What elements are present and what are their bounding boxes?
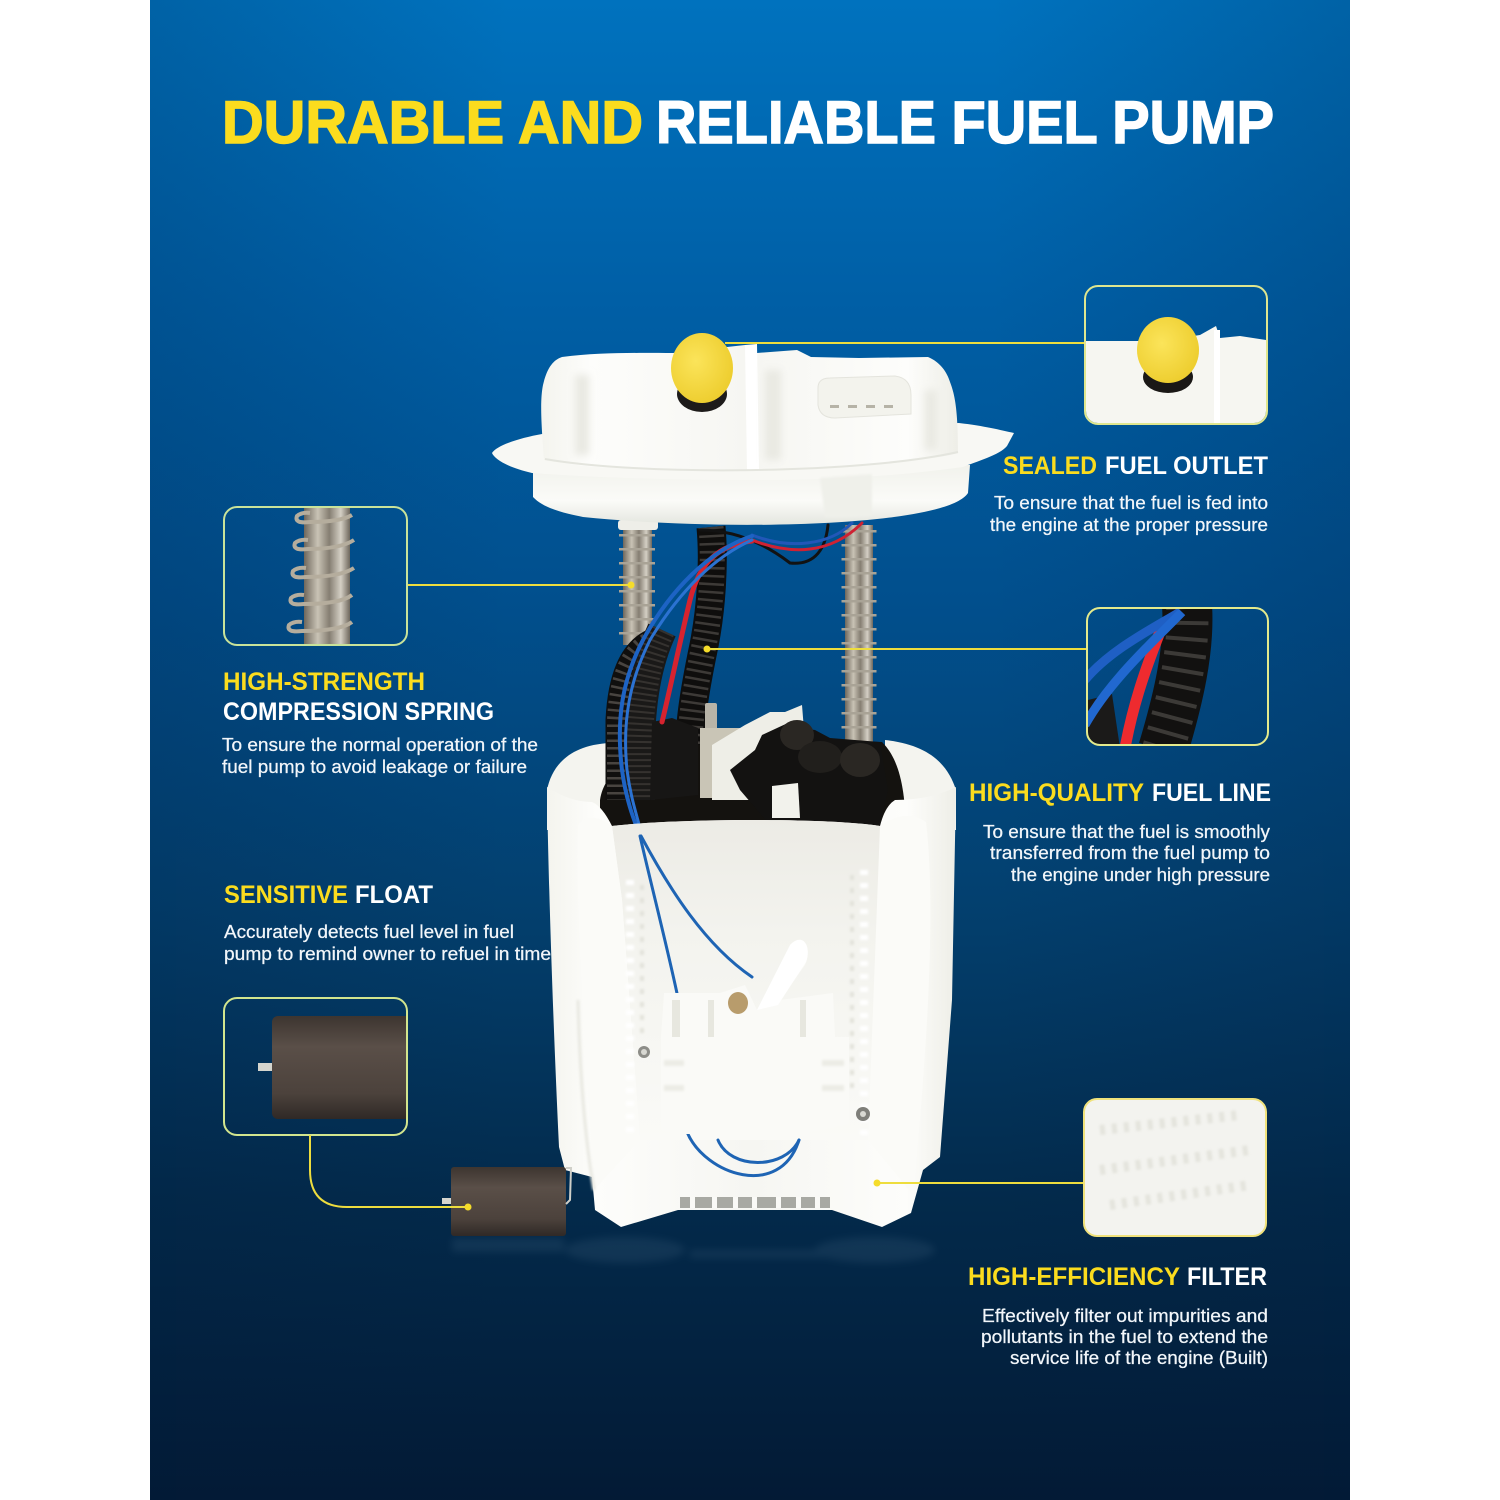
heading: sealed fuel outlet	[1003, 452, 1268, 480]
body text: sealed fuel outlet: the engine at the proper pressure	[990, 514, 1268, 535]
heading: sealed fuel outlet: SEALED	[1003, 452, 1097, 480]
body text: fuel line	[983, 821, 1271, 885]
heading: compression spring	[223, 668, 494, 726]
callout: filter	[874, 1099, 1268, 1368]
title: RELIABLE FUEL PUMP	[656, 89, 1274, 156]
body text: compression spring: To ensure the normal operation of the	[222, 734, 538, 755]
leader line: outlet	[725, 342, 1085, 344]
leader line: fuel line	[704, 646, 1087, 652]
heading: filter: FILTER	[1187, 1263, 1267, 1291]
heading: compression spring: HIGH-STRENGTH	[223, 668, 425, 696]
heading: sealed fuel outlet: FUEL OUTLET	[1105, 452, 1268, 480]
body text: sealed fuel outlet: To ensure that the fuel is fed into	[994, 492, 1268, 513]
body text: fuel line: To ensure that the fuel is smoothly	[983, 821, 1271, 842]
body text: fuel line: transferred from the fuel pump to	[990, 842, 1270, 863]
left rod and spring	[618, 520, 658, 645]
heading: sensitive float: FLOAT	[355, 881, 433, 909]
heading: fuel line: HIGH-QUALITY	[969, 779, 1144, 807]
pump top drum, flange and lid	[492, 344, 1014, 525]
blue gradient panel	[150, 0, 1350, 1500]
body text: sensitive float: pump to remind owner to refuel in time	[224, 943, 551, 964]
bottom slots	[680, 1197, 830, 1208]
body text: compression spring	[222, 734, 538, 777]
heading: filter: HIGH-EFFICIENCY	[968, 1263, 1180, 1291]
back of canister	[547, 738, 956, 830]
detail box: spring	[224, 505, 407, 647]
callout: compression spring	[222, 505, 634, 777]
body text: filter: service life of the engine (Built)	[1010, 1347, 1268, 1368]
wires	[620, 523, 862, 836]
floor reflection	[452, 1237, 935, 1263]
hoses	[618, 527, 712, 800]
leader line: filter	[874, 1180, 1084, 1186]
detail box: filter	[1084, 1099, 1266, 1236]
title: DURABLE AND	[222, 89, 643, 156]
screws	[638, 1046, 870, 1121]
float	[442, 1167, 571, 1236]
detail box: float	[224, 998, 412, 1135]
detail box: fuel line	[1085, 605, 1268, 750]
body text: fuel line: the engine under high pressure	[1011, 864, 1270, 885]
callout: sensitive float	[224, 881, 551, 1210]
black connector and pump internals	[650, 703, 888, 825]
heading: fuel line: FUEL LINE	[1152, 779, 1271, 807]
float arm mount	[638, 940, 870, 1134]
callout: fuel line	[704, 605, 1271, 885]
body text: sensitive float	[224, 921, 551, 964]
detail box: outlet cap	[1085, 286, 1267, 425]
yellow outlet cap	[671, 333, 733, 412]
heading: sensitive float: SENSITIVE	[224, 881, 348, 909]
body text: compression spring: fuel pump to avoid leakage or failure	[222, 756, 527, 777]
title	[222, 89, 1274, 156]
canister body	[547, 787, 956, 1227]
heading: fuel line	[969, 779, 1271, 807]
body text: sealed fuel outlet	[990, 492, 1268, 535]
leader line: spring	[407, 582, 634, 588]
body text: filter: pollutants in the fuel to extend the	[981, 1326, 1268, 1347]
heading: sensitive float	[224, 881, 433, 909]
callout: sealed fuel outlet	[725, 286, 1268, 535]
body text: filter: Effectively filter out impurities and	[982, 1305, 1268, 1326]
fuel pump illustration	[442, 333, 1014, 1263]
body text: filter	[981, 1305, 1268, 1368]
lower wires	[640, 836, 799, 1176]
heading: compression spring: COMPRESSION SPRING	[223, 698, 494, 726]
body text: sensitive float: Accurately detects fuel level in fuel	[224, 921, 514, 942]
right rod and spring	[845, 525, 873, 743]
leader line: float	[310, 1135, 472, 1210]
